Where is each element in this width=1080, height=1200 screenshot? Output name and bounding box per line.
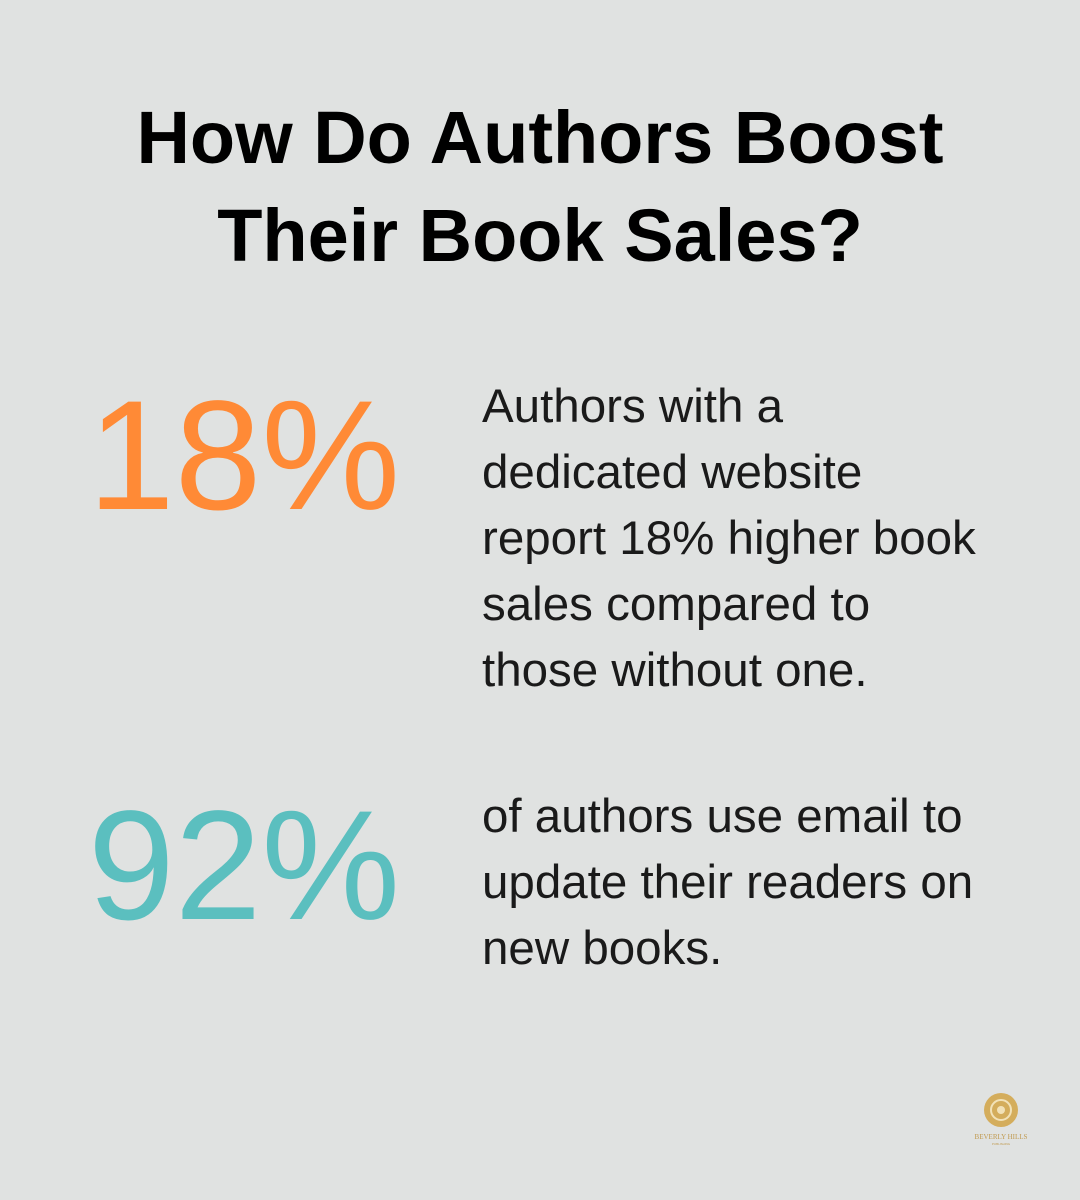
text: website stat: those without one. bbox=[482, 644, 868, 697]
text: website stat: dedicated website bbox=[482, 446, 862, 499]
text: email stat: update their readers on bbox=[482, 856, 973, 909]
logo: PUBLISHING bbox=[992, 1142, 1010, 1146]
title: How Do Authors Boost bbox=[136, 96, 944, 179]
text: website stat: sales compared to bbox=[482, 578, 870, 631]
text: email stat: new books. bbox=[482, 922, 722, 975]
title: Their Book Sales? bbox=[217, 194, 863, 277]
stat: 92%: 92% bbox=[88, 779, 400, 953]
text: website stat bbox=[482, 380, 976, 697]
text: email stat: of authors use email to bbox=[482, 790, 963, 843]
logo: BEVERLY HILLS bbox=[975, 1133, 1027, 1141]
logo bbox=[974, 1093, 1027, 1146]
text: website stat: report 18% higher book bbox=[482, 512, 976, 565]
text: website stat: Authors with a bbox=[482, 380, 783, 433]
stat: 18%: 18% bbox=[88, 369, 400, 543]
title bbox=[136, 96, 944, 277]
text: email stat bbox=[482, 790, 973, 975]
